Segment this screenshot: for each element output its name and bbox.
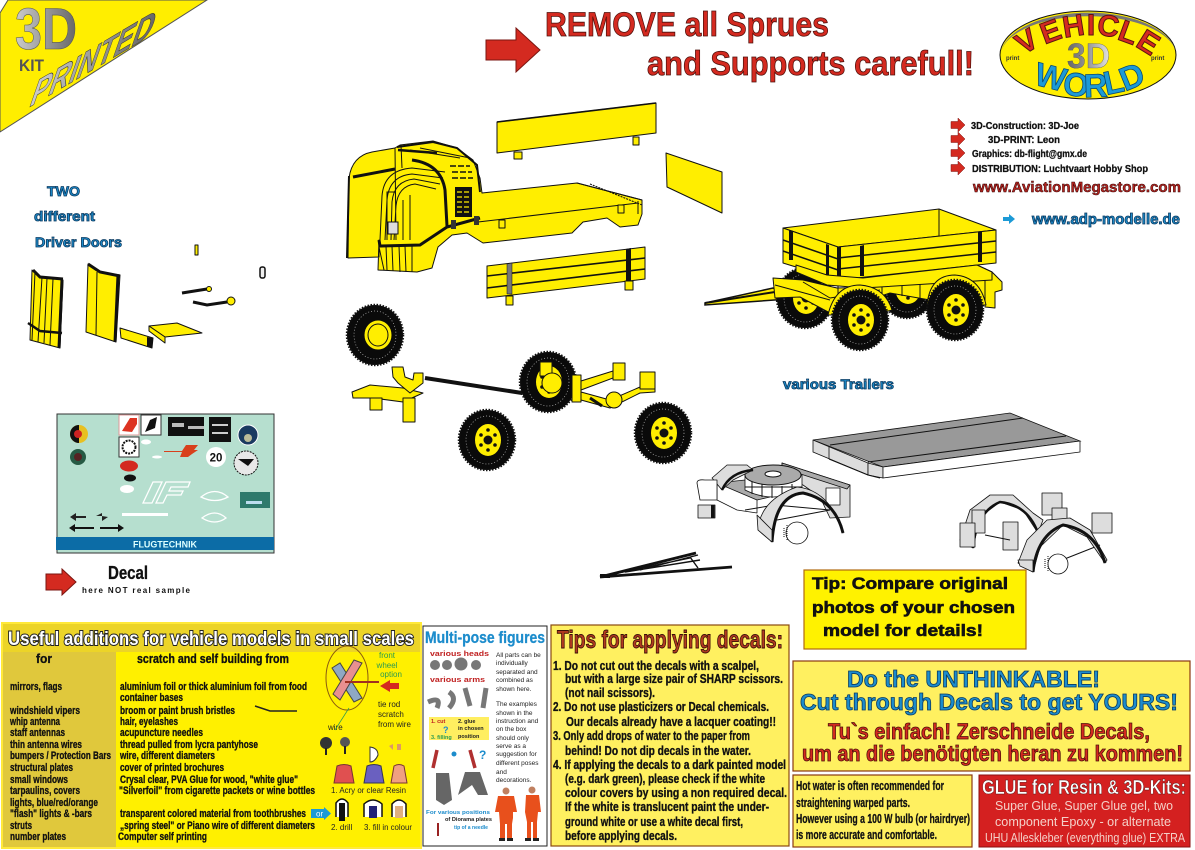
left column list xyxy=(9,681,111,843)
wheel steering diagram: from wire xyxy=(378,720,411,729)
english message: Do the UNTHINKABLE! xyxy=(847,666,1100,692)
right column list xyxy=(118,681,315,843)
right column list: aluminium foil or thick aluminium foil from food xyxy=(120,681,307,693)
right column list: hair, eyelashes xyxy=(120,716,178,728)
side note: separated and xyxy=(496,669,538,676)
body xyxy=(783,209,996,247)
link: aviation megastore: www.AviationMegastore.com xyxy=(972,179,1181,196)
logo mark: 3D: 3D xyxy=(1067,37,1110,76)
credits list: DISTRIBUTION: Luchtvaart Hobby Shop xyxy=(972,163,1148,175)
wheel: lower left xyxy=(459,410,515,470)
english message xyxy=(800,666,1178,715)
tips list xyxy=(553,658,787,843)
tips list: 4. If applying the decals to a dark painted model xyxy=(553,757,786,772)
panel: hot water note xyxy=(793,775,972,847)
side note: different poses xyxy=(496,760,539,767)
truck cab and bed xyxy=(347,141,642,272)
wheel steering diagram: front xyxy=(379,651,396,660)
decal caption with arrow: here NOT real sample xyxy=(82,586,191,595)
credits list: 3D-PRINT: Leon xyxy=(988,134,1060,146)
side note: on the box xyxy=(496,726,527,733)
column headings xyxy=(36,651,289,666)
label: two different driver doors: Driver Doors xyxy=(35,234,122,250)
left column list: lights, blue/red/orange xyxy=(10,797,98,809)
panel: tips for applying decals xyxy=(551,625,789,846)
needle note: of Diorama plates xyxy=(445,817,492,823)
front wheels xyxy=(832,290,888,350)
logo word: WORLD: W xyxy=(1031,55,1071,99)
front fenders xyxy=(828,285,892,315)
lamp parts xyxy=(320,737,412,832)
legs: ? xyxy=(479,748,486,762)
logo word: VEHICLE: V xyxy=(1010,23,1044,61)
label: two different driver doors: different xyxy=(34,208,95,224)
figure: worker 1 xyxy=(495,788,517,841)
logo word: VEHICLE: H xyxy=(1060,9,1087,45)
link: adp modelle with arrow: www.adp-modelle.de xyxy=(1031,211,1180,228)
right column list: acupuncture needles xyxy=(120,727,203,739)
wheel steering diagram: tie rod xyxy=(378,700,400,709)
panel: hot water note: Hot water is often recommended for xyxy=(796,778,944,793)
side note: instruction and xyxy=(496,718,539,725)
tips list: Our decals already have a lacquer coating!! xyxy=(566,714,776,729)
steps box: 1. cut xyxy=(431,719,446,725)
arms xyxy=(428,675,486,708)
logo: Vehicle 3D World xyxy=(1000,9,1176,104)
rear wheels xyxy=(777,268,833,328)
heading: remove sprues xyxy=(545,6,974,83)
blue or arrow xyxy=(311,807,331,820)
legs xyxy=(433,748,486,768)
drawbar xyxy=(705,288,803,305)
wheel steering diagram: wire xyxy=(327,723,343,732)
logo word: WORLD: L xyxy=(1100,62,1127,102)
needle note xyxy=(426,810,492,836)
steps box: ? xyxy=(443,725,448,735)
right column list: Crysal clear, PVA Glue for wood, "white glue" xyxy=(120,774,298,786)
panel title: Tips for applying decals: xyxy=(557,626,783,654)
trailer xyxy=(705,209,1002,350)
right column list: "Silverfoil" from cigarette packets or wine bottles xyxy=(119,785,315,797)
left column list: number plates xyxy=(10,831,66,843)
blue or arrow: or xyxy=(316,810,323,818)
left column list: windshield vipers xyxy=(9,705,80,717)
logo word: VEHICLE xyxy=(1010,9,1165,62)
turntable chassis xyxy=(697,463,850,544)
credits list: 3D-Construction: 3D-Joe xyxy=(971,120,1079,132)
side note xyxy=(496,652,541,784)
right column list: wire, different diameters xyxy=(119,750,215,762)
panel: hot water note: is more accurate and comfortable. xyxy=(796,827,937,842)
wheel steering diagram: wheel xyxy=(376,661,398,670)
logo word: WORLD: R xyxy=(1083,67,1108,104)
logo word: WORLD xyxy=(1031,55,1150,104)
panel: glue advice: Super Glue, Super Glue gel, two xyxy=(995,798,1173,813)
tips list: behind! Do not dip decals in the water. xyxy=(565,743,751,758)
right column list: cover of printed brochures xyxy=(120,762,224,774)
side note: combined as xyxy=(496,677,534,684)
logo word: WORLD: O xyxy=(1062,65,1091,104)
side note: individually xyxy=(496,660,529,667)
lamp parts: 3. fill in colour xyxy=(364,823,412,832)
fittings xyxy=(120,328,153,348)
heads xyxy=(430,649,489,670)
right column list: Computer self printing xyxy=(118,831,207,843)
tips list: 3. Only add drops of water to the paper from xyxy=(553,728,750,743)
right column list: broom or paint brush bristles xyxy=(120,705,235,717)
panel title: Multi-pose figures xyxy=(425,628,545,647)
decal caption with arrow xyxy=(46,563,191,595)
right column list: container bases xyxy=(120,692,183,704)
tips list: 1. Do not cut out the decals with a scalpel, xyxy=(553,658,759,673)
door 1 xyxy=(28,270,63,348)
lamp parts: 1. Acry or clear Resin xyxy=(331,786,406,795)
wheel steering diagram: scratch xyxy=(378,710,404,719)
english message: Cut through Decals to get YOURS! xyxy=(800,689,1178,715)
decal sheet sample xyxy=(56,414,274,553)
logo word: WORLD: D xyxy=(1114,55,1150,98)
panel: useful additions xyxy=(1,622,422,849)
panel: hot water note: straightening warped parts. xyxy=(796,795,910,810)
left column list: whip antenna xyxy=(9,716,61,728)
tips list: 2. Do not use plasticizers or Decal chemicals. xyxy=(553,699,769,714)
side note: suggestion for xyxy=(496,751,538,758)
front axle assembly xyxy=(352,367,522,422)
logo word: VEHICLE: L xyxy=(1114,14,1143,52)
decal sheet sample: FLUGTECHNIK xyxy=(133,540,197,550)
side note: shown here. xyxy=(496,686,532,693)
corner banner: 3D kit printed xyxy=(0,0,207,132)
panel title: Useful additions for vehicle models in small scales xyxy=(8,629,414,650)
truck side board xyxy=(487,247,645,305)
side note: serve as a xyxy=(496,743,526,750)
wheel steering diagram xyxy=(326,646,411,732)
label: two different driver doors: TWO xyxy=(47,183,80,199)
heading: remove sprues: REMOVE all Sprues xyxy=(545,6,829,44)
callout: compare photos tip: model for details! xyxy=(823,622,983,640)
logo word: VEHICLE: E xyxy=(1036,13,1066,51)
tips list: (e.g. dark green), please check if the white xyxy=(565,771,765,786)
german message xyxy=(802,719,1183,766)
heading: remove sprues: and Supports carefull! xyxy=(647,45,974,83)
decal sheet sample: 20 xyxy=(210,452,222,464)
needle note: For various positions xyxy=(426,810,490,816)
arms: various arms xyxy=(430,675,485,684)
credits list: Graphics: db-flight@gmx.de xyxy=(972,148,1087,160)
wheel: loose with plain hub xyxy=(347,305,403,365)
small cab parts: doors and fittings xyxy=(28,245,265,348)
german message: Tu`s einfach! Zerschneide Decals, xyxy=(828,719,1150,744)
logo word: VEHICLE: I xyxy=(1087,9,1095,42)
chassis xyxy=(773,265,1002,313)
side note: and xyxy=(496,769,507,776)
label: various trailers: various Trailers xyxy=(783,376,894,392)
steps box: in chosen xyxy=(458,726,484,732)
tips list: If the white is translucent paint the under- xyxy=(565,799,769,814)
steps box: 2. glue xyxy=(458,719,475,725)
label: two different driver doors xyxy=(34,183,122,250)
A-frame drawbar xyxy=(600,553,732,578)
tips list: colour covers by using a non required decal. xyxy=(565,785,787,800)
callout: compare photos tip xyxy=(804,570,1026,649)
lamp parts: 2. drill xyxy=(331,823,353,832)
wheel: lower right xyxy=(635,403,691,463)
left column list: bumpers / Protection Bars xyxy=(10,750,111,762)
side note: shown in the xyxy=(496,710,533,717)
panel: do the unthinkable xyxy=(793,661,1190,771)
side note: should only xyxy=(496,735,530,742)
needle note: tip of a needle xyxy=(454,825,488,831)
logo: Vehicle 3D World: print xyxy=(1151,56,1164,62)
steps box xyxy=(429,717,489,741)
decal caption with arrow: Decal xyxy=(108,563,148,583)
left column list: small windows xyxy=(10,774,68,786)
tips list: before applying decals. xyxy=(565,828,677,843)
truck small panel xyxy=(666,153,722,213)
tips list: but with a large size pair of SHARP scissors. xyxy=(565,671,783,686)
logo: Vehicle 3D World: print xyxy=(1006,56,1019,62)
callout: compare photos tip: photos of your chosen xyxy=(812,599,1015,617)
heads: various heads xyxy=(430,649,489,658)
steps box: 3. filling xyxy=(431,735,452,741)
arrow: header red arrow xyxy=(486,28,540,72)
left column list: structural plates xyxy=(10,762,73,774)
left column list: thin antenna wires xyxy=(10,739,82,751)
callout: compare photos tip: Tip: Compare original xyxy=(812,575,1008,593)
rear axle with wheel xyxy=(520,352,655,412)
left column list: "flash" lights & -bars xyxy=(10,808,92,820)
right column list: „spring steel" or Piano wire of different diameters xyxy=(120,820,315,832)
side note: decorations. xyxy=(496,777,532,784)
torsos xyxy=(436,773,452,805)
panel: hot water note: However using a 100 W bulb (or hairdryer) xyxy=(796,811,970,826)
second axle chassis xyxy=(960,493,1112,574)
column headings: for xyxy=(36,651,52,666)
banner text: KIT: KIT xyxy=(19,56,45,75)
left column list: tarpaulins, covers xyxy=(10,785,80,797)
truck tail board xyxy=(497,103,656,159)
tips list: (not nail scissors). xyxy=(565,685,655,700)
steps box: position xyxy=(458,734,480,740)
panel: glue advice xyxy=(979,775,1190,847)
left column list: staff antennas xyxy=(10,727,65,739)
logo word: VEHICLE: C xyxy=(1095,9,1121,44)
left column list: struts xyxy=(10,820,32,832)
logo word: VEHICLE: E xyxy=(1131,24,1165,62)
right column list: thread pulled from lycra pantyhose xyxy=(120,739,258,751)
side note: The examples xyxy=(496,701,538,708)
right column list: transparent colored material from toothbrushes xyxy=(120,808,306,820)
left column list: mirrors, flags xyxy=(10,681,62,693)
tips list: ground white or use a white decal first, xyxy=(565,814,743,829)
door 2 xyxy=(86,264,120,342)
panel: multi-pose figures xyxy=(423,626,547,846)
figure: worker 2 xyxy=(525,786,541,841)
side note: All parts can be xyxy=(496,652,541,659)
panel: glue advice: component Epoxy - or alternate xyxy=(995,814,1171,829)
column headings: scratch and self building from xyxy=(137,651,289,666)
wiper sketch xyxy=(255,706,297,711)
trailer flat bed plate xyxy=(813,413,1080,478)
wheel steering diagram: option xyxy=(380,670,402,679)
credits list xyxy=(951,118,1181,196)
